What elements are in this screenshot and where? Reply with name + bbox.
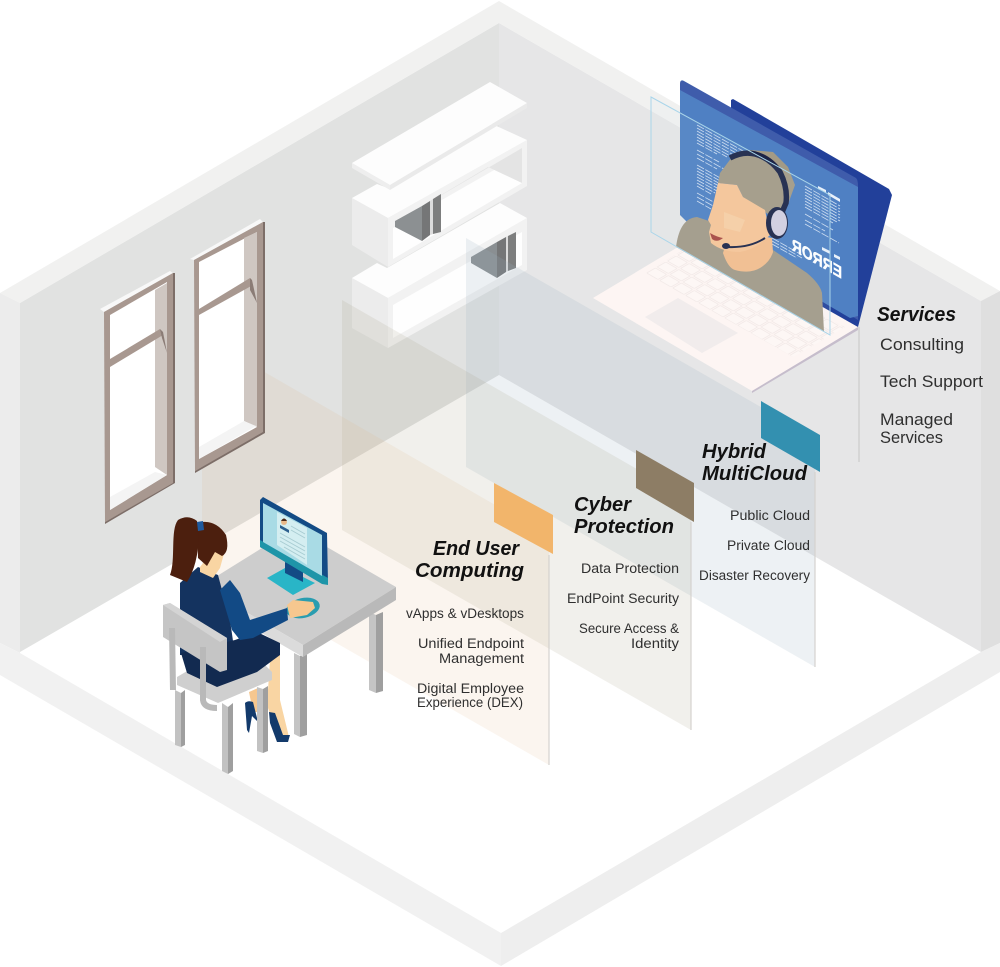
upper shelf box: [352, 123, 527, 267]
chair legs: [175, 686, 268, 774]
seat: [177, 640, 272, 703]
front left floor edge: [0, 643, 501, 966]
hair: [170, 517, 227, 582]
left window: [100, 271, 175, 524]
column edge lines: [549, 327, 859, 765]
laptop base: [593, 235, 858, 393]
top shelf: [352, 82, 527, 190]
left wall end: [0, 293, 20, 653]
right wall end: [981, 291, 1000, 652]
text: end user computing: Experience (DEX): [417, 695, 523, 710]
tab: hybrid multicloud: [761, 401, 820, 472]
text: services: [877, 304, 983, 447]
error text: ERROR: [792, 235, 842, 283]
text: end user computing: Digital Employee: [417, 681, 524, 696]
screen heading bars: [818, 186, 840, 260]
wall top cap: [0, 1, 1000, 303]
text: cyber protection: EndPoint Security: [567, 591, 679, 606]
screen code lines: [697, 125, 840, 258]
text: services: Consulting: [880, 335, 964, 354]
hand: [287, 600, 315, 618]
agent figure: [676, 150, 824, 332]
chair seat and legs: [175, 640, 272, 774]
monitor frame: [260, 497, 328, 583]
panel: hybrid multicloud plane: [466, 238, 815, 667]
text: services: Services: [880, 428, 943, 447]
skirt: [181, 632, 280, 687]
text: hybrid multicloud: [699, 441, 810, 583]
text: end user computing: Unified Endpoint: [418, 636, 524, 651]
text: end user computing: Management: [439, 651, 524, 666]
panel: cyber protection plane: [342, 300, 691, 730]
near leg: [267, 652, 289, 737]
left wall: [20, 23, 499, 652]
desk top: [201, 528, 396, 645]
panel: end user computing plane: [202, 336, 549, 765]
books: [395, 194, 441, 241]
monitor stand: [267, 562, 315, 595]
service lists: [406, 304, 983, 710]
books: [471, 232, 516, 278]
tab: end user computing: [494, 483, 553, 554]
woman's legs and shoes: [245, 652, 290, 742]
floor: [20, 375, 981, 933]
text: end user computing: Computing: [415, 560, 524, 582]
tab: cyber protection: [636, 450, 694, 522]
agent hair: [718, 150, 795, 222]
laptop lid: [680, 80, 892, 327]
agent mouth: [710, 233, 723, 241]
headset: [722, 153, 788, 249]
desk legs: [294, 612, 383, 737]
text: cyber protection: Protection: [574, 516, 674, 538]
woman at desk: [170, 517, 315, 687]
lower shelf box: [352, 203, 527, 348]
trackpad: [645, 298, 738, 353]
hair tie: [197, 521, 204, 531]
text: services: Managed: [880, 410, 953, 429]
desk: [201, 528, 396, 737]
far leg: [249, 688, 261, 712]
monitor screen: [263, 503, 322, 576]
text: hybrid multicloud: Disaster Recovery: [699, 568, 810, 583]
wall shelves: [352, 82, 527, 348]
text: cyber protection: Identity: [631, 636, 679, 651]
arm: [220, 580, 288, 640]
chair uprights: [172, 628, 217, 708]
text: cyber protection: Data Protection: [581, 561, 679, 576]
text: hybrid multicloud: MultiCloud: [702, 463, 808, 485]
chair back: [163, 603, 227, 708]
agent neck: [723, 230, 773, 272]
transparent glass screen: [651, 97, 830, 335]
text: hybrid multicloud: Public Cloud: [730, 508, 810, 523]
neck: [200, 550, 225, 578]
agent shoulders: [676, 217, 824, 332]
text: hybrid multicloud: Hybrid: [702, 441, 767, 463]
right window: [190, 219, 265, 473]
text: hybrid multicloud: Private Cloud: [727, 538, 810, 553]
document on screen: [277, 512, 307, 565]
text: end user computing: [406, 538, 524, 710]
text: cyber protection: Secure Access &: [579, 621, 679, 636]
right wall: [499, 23, 981, 652]
front right floor edge: [501, 643, 1000, 966]
agent face: [708, 183, 770, 252]
text: services: Services: [877, 304, 956, 326]
shoes: [245, 701, 290, 742]
text: end user computing: vApps & vDesktops: [406, 606, 524, 621]
torso: [180, 567, 235, 655]
text: cyber protection: [567, 494, 679, 651]
laptop with support agent: [593, 80, 892, 393]
keyboard: [645, 250, 845, 357]
text: end user computing: End User: [433, 538, 520, 560]
computer monitor: [260, 497, 328, 595]
text: services: Tech Support: [880, 372, 983, 391]
mouse: [284, 595, 322, 621]
text: cyber protection: Cyber: [574, 494, 632, 516]
